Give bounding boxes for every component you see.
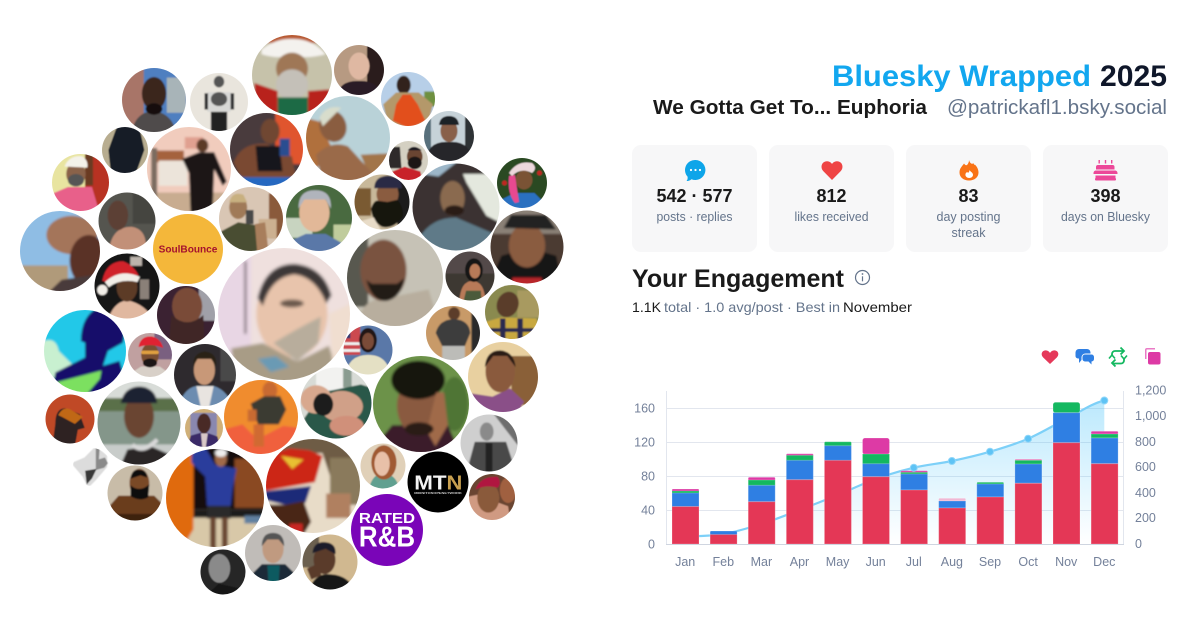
bar: Jan <box>672 489 699 544</box>
right axis labels: 200 <box>1135 511 1156 525</box>
avatar: red cap <box>128 333 172 377</box>
month labels: Sep <box>979 555 1001 569</box>
bar: Aug <box>939 498 966 544</box>
avatar: man reclining on couch <box>306 96 390 180</box>
avatar: orange silhouette smoke <box>46 394 94 444</box>
avatar: monochrome figure <box>190 73 248 131</box>
icon: legend quotes <box>1145 348 1160 364</box>
stat card: day posting streak: streak <box>952 226 986 240</box>
cumulative area <box>685 400 1104 544</box>
stat card: likes received <box>769 145 894 252</box>
right axis labels: 400 <box>1135 486 1156 500</box>
month labels: Mar <box>751 555 772 569</box>
bar: Apr <box>786 454 813 544</box>
avatar: Rated R&B logo <box>351 494 423 566</box>
month labels: Jul <box>906 555 922 569</box>
engagement summary <box>632 299 912 315</box>
icon: heart <box>822 161 842 180</box>
line data points <box>910 397 1108 471</box>
avatar: large selfie man <box>347 230 443 326</box>
icon: flame <box>960 160 978 180</box>
month labels <box>675 555 1115 569</box>
handle: @patrickafl1.bsky.social <box>947 97 1167 119</box>
avatar: pink santa hat <box>497 158 547 208</box>
avatar: tank top selfie <box>230 113 303 186</box>
avatar: man by reflecting pool <box>98 382 180 464</box>
avatar: wonder woman costume <box>266 439 360 533</box>
stat card: likes received: likes received <box>794 210 869 224</box>
stat card: likes received: 812 <box>816 186 846 206</box>
avatar: pink shirt man <box>52 154 109 211</box>
avatar: curly hair thinking <box>373 356 469 452</box>
stat card: days on Bluesky <box>1043 145 1168 252</box>
stacked bars <box>672 402 1118 544</box>
avatar: woman with flag <box>344 326 392 374</box>
left axis labels: 120 <box>634 436 655 450</box>
avatar: cartoon bearded man <box>108 466 162 520</box>
stat card: day posting streak: 83 <box>958 186 978 206</box>
avatar: red jacket in car <box>389 141 428 180</box>
month labels: Dec <box>1093 555 1115 569</box>
icon: legend heart <box>1042 350 1058 364</box>
display name: We Gotta Get To... Euphoria <box>653 97 928 119</box>
title: 2025 <box>1100 60 1167 93</box>
avatar: woman with red hair <box>360 444 406 488</box>
avatar: SoulBounce logo <box>153 214 223 284</box>
stat card: day posting streak <box>906 145 1031 252</box>
avatar: selfie with phone <box>219 187 283 251</box>
icon: birthday cake <box>1094 160 1118 180</box>
stat card: day posting streak: day posting <box>936 210 1001 224</box>
grid lines <box>666 391 1124 544</box>
month labels: Nov <box>1055 555 1078 569</box>
bar: Jun <box>862 438 890 544</box>
baseline <box>666 544 1124 546</box>
avatar: monochrome hand <box>73 448 108 486</box>
avatar: santa hat on black <box>94 254 160 318</box>
avatar: MTN logo: N <box>447 472 462 494</box>
avatar: SoulBounce logo: SoulBounce <box>159 245 218 256</box>
heading: your engagement: Your Engagement <box>632 265 845 293</box>
bar: Oct <box>1015 459 1042 544</box>
avatar: orange sweater <box>381 72 435 126</box>
left axis labels: 160 <box>634 402 655 416</box>
stat card: days on Bluesky: 398 <box>1090 186 1120 206</box>
right axis labels: 800 <box>1135 435 1156 449</box>
avatar: shirtless grey background <box>98 192 156 250</box>
month labels: May <box>826 555 850 569</box>
title: Bluesky Wrapped <box>832 60 1091 93</box>
avatar: hotel mirror selfie <box>147 127 231 211</box>
right axis labels: 1,200 <box>1135 384 1166 398</box>
avatar: MTN logo <box>408 452 468 512</box>
avatar: dark figure back <box>102 127 148 173</box>
right axis labels: 0 <box>1135 537 1142 551</box>
avatar: santa <box>252 35 332 115</box>
avatar: bald man <box>334 45 384 95</box>
chart legend <box>1042 348 1160 366</box>
avatar: orange cartoon <box>224 380 298 454</box>
left axis labels: 40 <box>641 504 655 518</box>
bar: Mar <box>748 477 775 544</box>
avatar: man with durag <box>469 474 515 520</box>
left axis labels: 80 <box>641 470 655 484</box>
avatar: bearded man with cap <box>354 174 410 230</box>
avatar: older man smiling <box>286 185 352 251</box>
avatar: man lying on green couch <box>300 368 372 438</box>
month labels: Jun <box>866 555 886 569</box>
chart: monthly engagement with cumulative line <box>634 384 1166 569</box>
avatar: digital woman <box>446 252 494 300</box>
stat card: days on Bluesky: days on Bluesky <box>1061 210 1151 224</box>
avatar: grayscale speaker <box>460 414 518 472</box>
bar: May <box>824 442 851 544</box>
avatar: black and white portrait <box>200 550 246 594</box>
bar: Jul <box>901 471 928 544</box>
avatar: man in blue suit <box>174 344 236 406</box>
right axis labels: 1,000 <box>1135 409 1166 423</box>
avatar: MTN logo: MIDNITOSOPENETWORK <box>414 491 463 495</box>
month labels: Apr <box>790 555 809 569</box>
avatar: grey-haired man in jacket <box>245 525 301 581</box>
avatar: smiling man purple shirt <box>468 342 538 412</box>
right axis labels <box>1135 384 1166 551</box>
avatar: plaid shirt <box>485 285 539 339</box>
avatar: mirror selfie man <box>426 306 480 360</box>
panel: avatar bubble cluster <box>16 31 567 597</box>
left axis labels: 0 <box>648 538 655 552</box>
icon: legend reposts <box>1109 348 1127 366</box>
right axis labels: 600 <box>1135 460 1156 474</box>
bar: Nov <box>1053 402 1080 544</box>
icon: chat bubble <box>685 160 705 181</box>
bar: Sep <box>977 482 1004 544</box>
month labels: Feb <box>713 555 734 569</box>
avatar: close-up dark purple <box>157 286 215 344</box>
engagement summary: total · 1.0 avg/post · Best in <box>664 299 840 315</box>
avatar: man in car <box>412 164 500 250</box>
cumulative line <box>685 400 1104 536</box>
stat card: posts and replies: 542 · 577 <box>656 186 732 206</box>
engagement summary: 1.1K <box>632 299 662 315</box>
month labels: Oct <box>1018 555 1038 569</box>
month labels: Aug <box>941 555 963 569</box>
engagement summary: November <box>843 299 912 315</box>
stat card: posts and replies: posts · replies <box>656 210 732 224</box>
left axis labels <box>634 402 655 552</box>
month labels: Jan <box>675 555 695 569</box>
avatar: Rated R&B logo: RATED <box>359 510 415 527</box>
avatar: Rated R&B logo: R&B <box>359 522 415 554</box>
avatar: large sketch portrait <box>218 248 350 380</box>
avatar: blue tinted nike <box>44 310 126 392</box>
icon: info <box>856 270 870 284</box>
bar: Feb <box>710 531 737 544</box>
avatar: man with cap and black shirt <box>424 111 474 161</box>
bar: Dec <box>1091 431 1118 544</box>
avatar: man with black hat <box>490 210 564 284</box>
stat card: posts and replies <box>632 145 757 252</box>
avatar: MTN logo: MT <box>414 472 447 494</box>
avatar: man with blue sky <box>122 68 186 132</box>
avatar: locker room selfie <box>166 449 264 547</box>
avatar: small painting portrait <box>185 409 223 447</box>
avatar: tree and sky face <box>20 211 100 291</box>
icon: legend replies <box>1076 349 1094 364</box>
panel: stat cards <box>632 145 1168 252</box>
avatar: man hand on face <box>302 534 358 590</box>
